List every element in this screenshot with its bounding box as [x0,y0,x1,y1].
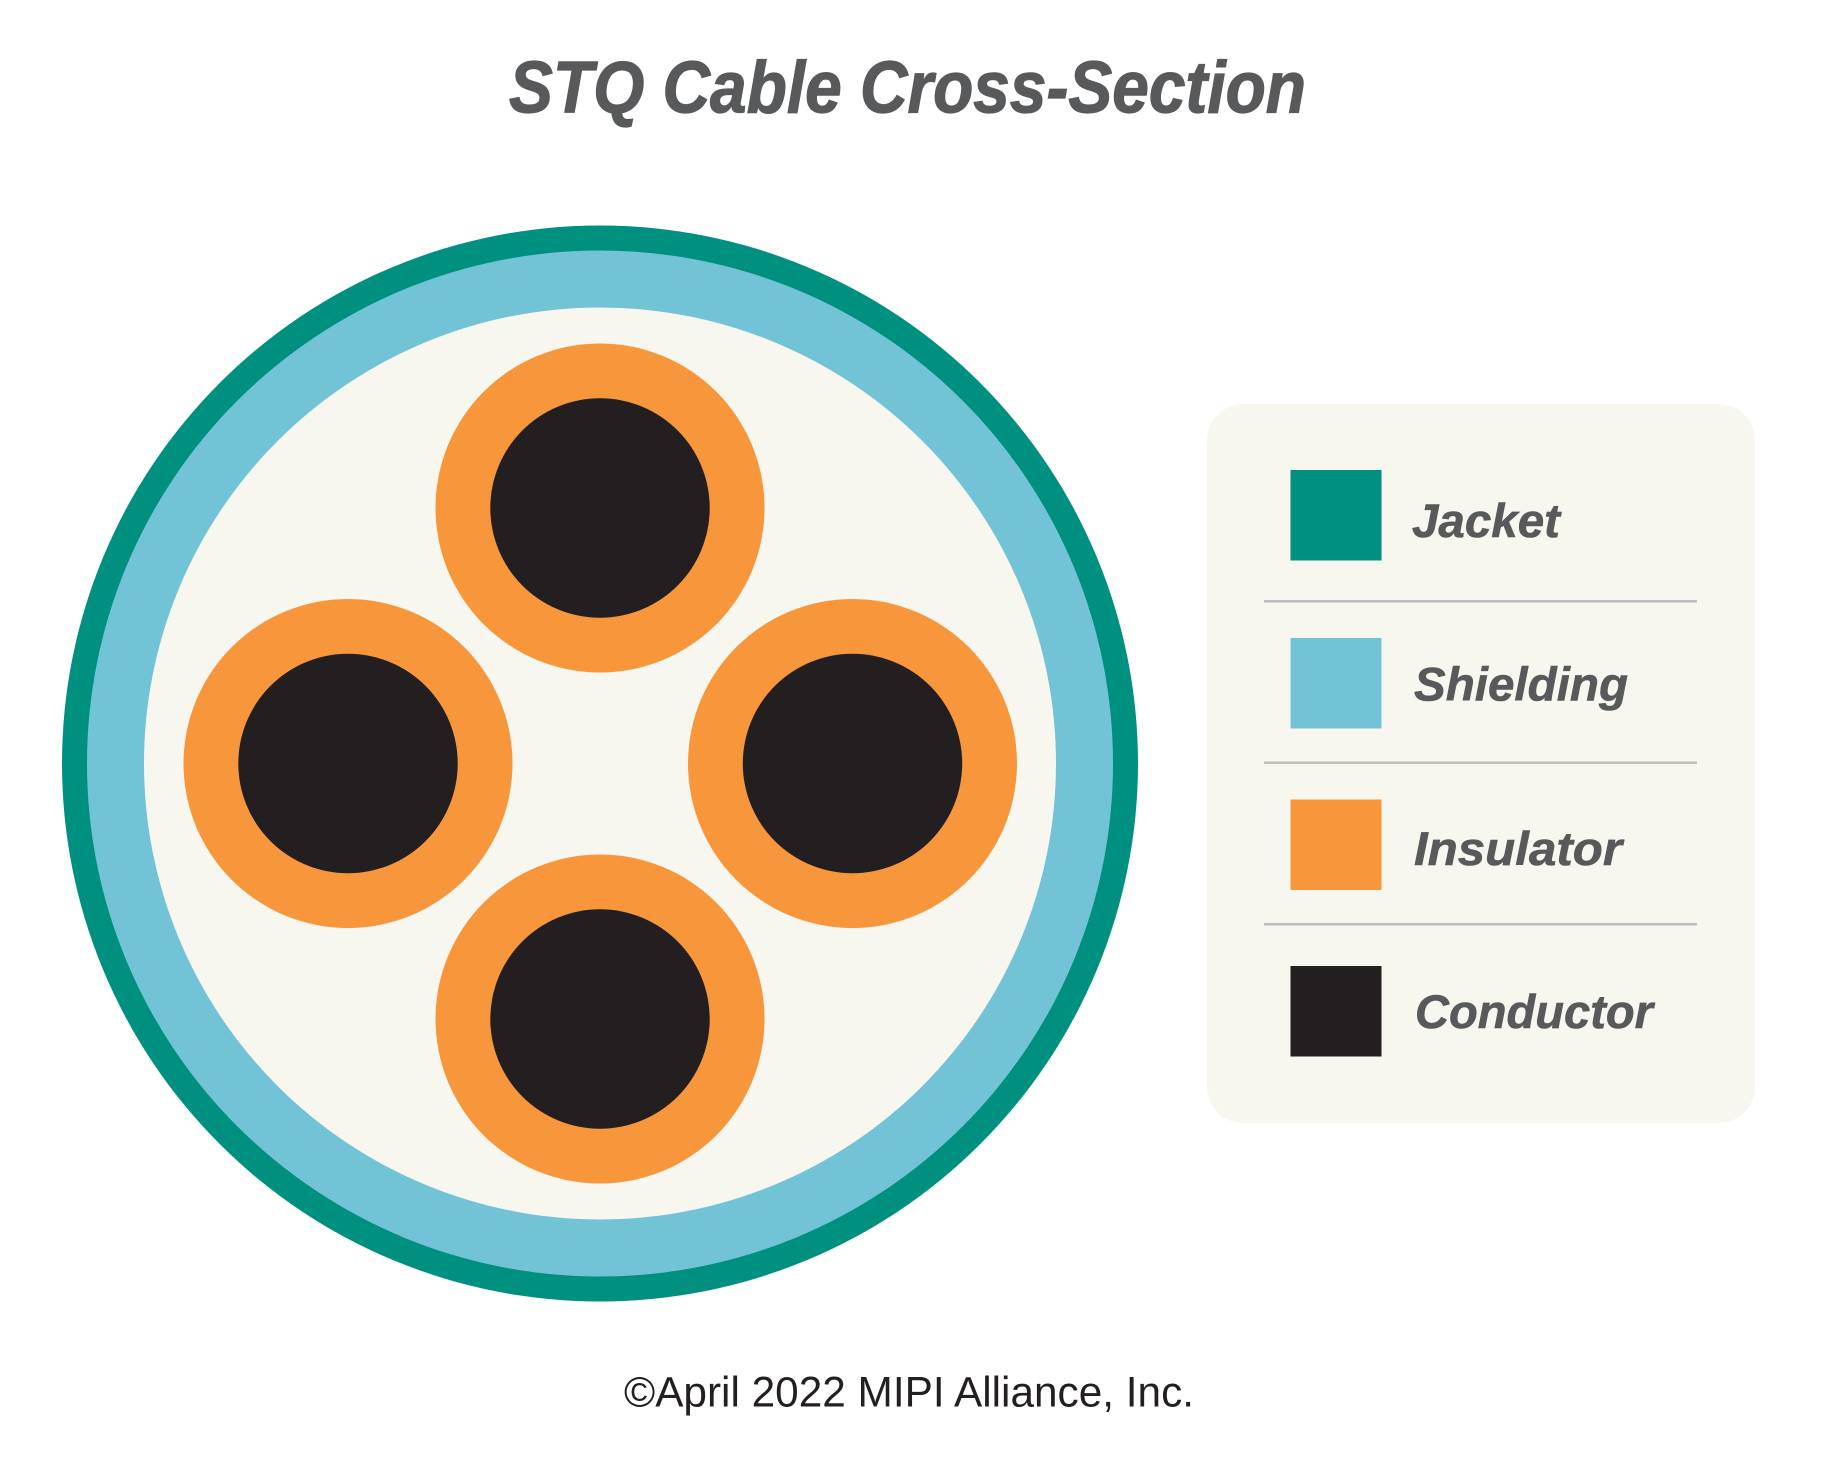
left wire [184,599,512,928]
cable interior [144,308,1056,1220]
legend item: conductor: Conductor [1415,985,1656,1038]
bottom wire [436,854,764,1184]
legend background [1207,404,1755,1123]
shielding ring [87,250,1113,1276]
title: STQ Cable Cross-Section [509,48,1306,128]
legend item: jacket: Jacket [1412,494,1562,547]
legend item: jacket [1290,470,1562,560]
legend item: insulator [1290,800,1625,890]
legend panel [1207,404,1755,1123]
right wire [688,599,1017,928]
copyright footer: ©April 2022 MIPI Alliance, Inc. [624,1368,1194,1416]
legend item: insulator: Insulator [1414,822,1625,875]
jacket ring [62,226,1138,1302]
legend item: shielding: Shielding [1414,658,1628,710]
cable cross-section diagram [62,226,1138,1302]
top wire [436,344,764,672]
legend item: shielding [1290,638,1628,728]
legend item: conductor [1290,966,1656,1056]
